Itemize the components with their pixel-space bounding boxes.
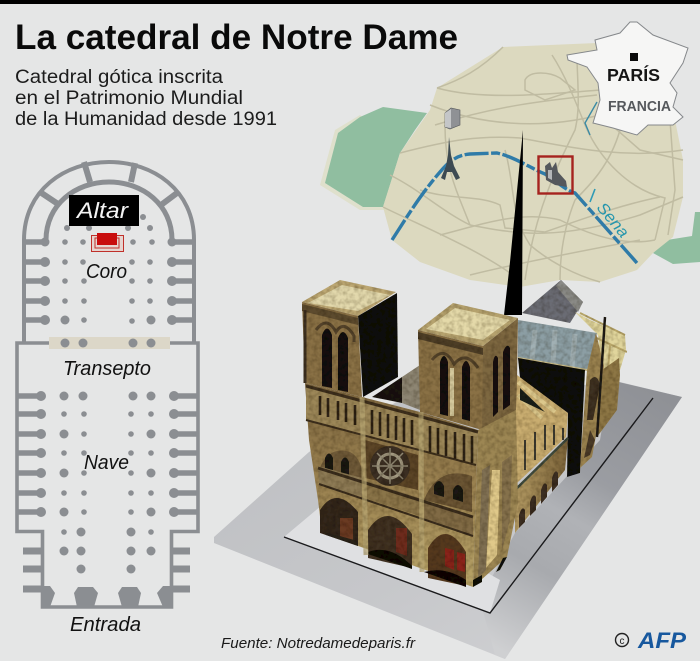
right tower: front <box>418 330 483 430</box>
plan: columns <box>36 214 179 574</box>
tall pole <box>597 317 605 437</box>
label: PARÍS: PARÍS <box>607 64 660 85</box>
label: Entrada: Entrada <box>70 614 141 636</box>
facade: portals <box>320 498 466 587</box>
subtitle: de la Humanidad desde 1991 <box>15 109 277 130</box>
map: red location box <box>538 156 572 194</box>
rear flying buttresses <box>575 312 627 437</box>
source: Fuente: Notredamedeparis.fr <box>221 635 416 652</box>
plate: black inset line <box>284 398 653 613</box>
plan: lower buttresses <box>23 551 190 589</box>
label: FRANCIA: FRANCIA <box>608 99 672 115</box>
subtitle: Catedral gótica inscrita <box>15 67 223 88</box>
icon: Eiffel tower <box>441 137 460 180</box>
transept end wall <box>580 333 604 468</box>
title: La catedral de Notre Dame <box>15 18 458 57</box>
AFP logo: c <box>620 636 624 647</box>
plan: transept band <box>49 337 170 349</box>
plate: right band <box>480 380 682 659</box>
label: Sena: Sena <box>593 200 632 241</box>
label: Nave: Nave <box>84 452 129 474</box>
right tower: windows <box>440 356 470 421</box>
icon: red altar <box>92 233 124 252</box>
locator map of France <box>567 22 688 135</box>
plate: inner light area <box>284 490 500 613</box>
base plate <box>214 380 682 659</box>
left tower: windows <box>322 328 348 392</box>
roof: blue slope <box>518 320 597 370</box>
right tower: side <box>480 318 518 430</box>
nave: lower side wall <box>515 438 568 533</box>
map of Paris <box>320 43 700 287</box>
facade: main wall <box>305 383 478 587</box>
AFP logo <box>616 628 686 653</box>
spire <box>504 130 523 315</box>
subtitle: en el Patrimonio Mundial <box>15 88 243 109</box>
left tower: top <box>302 280 396 316</box>
label: Transepto: Transepto <box>63 358 151 380</box>
left tower: dark side <box>358 293 398 397</box>
plan: transept and nave walls <box>17 343 198 607</box>
facade: vertical piers <box>362 397 422 572</box>
right tower: top <box>418 303 518 346</box>
map: pale outskirts <box>320 115 400 210</box>
nave: flying buttress upper <box>508 375 568 483</box>
map: green parks <box>325 107 700 264</box>
map: streets <box>383 47 683 282</box>
cathedral <box>302 280 627 587</box>
facade: corner shadow <box>473 575 482 587</box>
icon: Notre Dame on map <box>545 162 567 187</box>
subtitle <box>15 67 277 130</box>
marker: Paris <box>630 53 638 61</box>
facade: upper gallery <box>306 386 478 465</box>
top black bar <box>0 0 700 4</box>
left tower: front <box>302 302 362 397</box>
facade: kings gallery <box>318 466 473 536</box>
AFP logo: AFP <box>637 628 686 653</box>
map: side canal <box>585 102 597 135</box>
plate: outer slab <box>214 382 682 659</box>
floor plan <box>17 162 198 636</box>
plan: choir buttresses <box>18 242 197 512</box>
map: river Seine <box>392 153 637 263</box>
inner roof gap <box>372 377 402 403</box>
plan: entrance piers <box>42 586 172 607</box>
icon: Arc de Triomphe <box>445 108 460 129</box>
facade: corner buttress <box>473 410 518 587</box>
plan: apse walls <box>24 162 194 344</box>
transept dark wall <box>518 358 585 477</box>
map: city area <box>383 43 683 287</box>
plan: altar label <box>69 195 139 226</box>
roof: rear dark slope <box>522 280 583 323</box>
plan: altar label: Altar <box>75 198 130 223</box>
facade: windows and rose <box>318 440 472 512</box>
label: Coro: Coro <box>86 261 127 283</box>
